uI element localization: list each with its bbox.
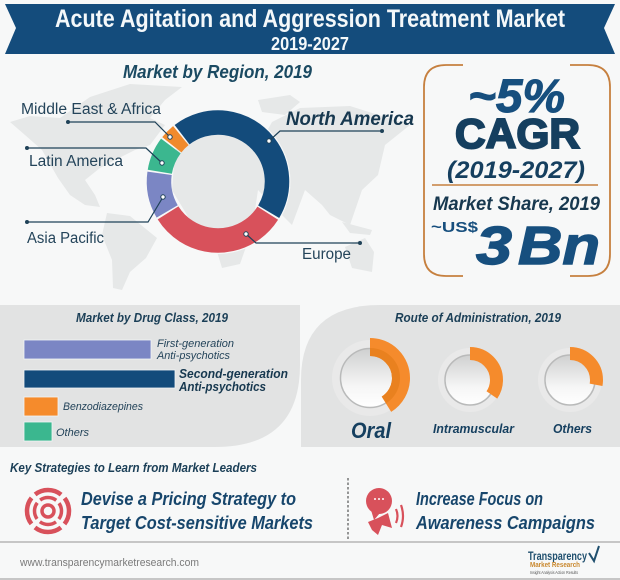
gauge: oral [332,340,408,443]
callout: CAGR and market share: (2019-2027) [447,157,585,184]
callout: CAGR and market share [424,65,610,276]
callout: CAGR and market share: Bn [518,216,600,276]
callout: CAGR and market share: ~US$ [431,219,479,236]
callout: CAGR and market share: Market Share, 2019 [433,194,600,215]
panel: route of administration: Route of Administration, 2019 [395,310,562,325]
leader lines and region labels [21,101,414,263]
subtitle: market by region: Market by Region, 2019 [123,62,312,82]
gauge: intramuscular [433,348,515,436]
strategy: awareness [415,488,595,533]
bar: others [24,422,52,441]
icon: speech and megaphone [366,488,403,535]
gauge: others: Others [553,421,592,436]
gauge: others [538,348,602,436]
panel: route of administration [301,305,620,447]
leader lines and region labels: Asia Pacific [27,230,104,247]
callout: CAGR and market share: 3 [476,216,512,276]
heading: key strategies: Key Strategies to Learn from Market Leaders [10,461,257,475]
panel: market by drug class: Second-generation [179,366,288,381]
icon: target [27,490,69,532]
callout: CAGR and market share: CAGR [455,110,580,157]
logo: Insight Analysis Action Results [530,570,579,575]
strategy: awareness: Increase Focus on [416,488,543,509]
callout: CAGR and market share: ~5% [468,69,565,122]
panel: market by drug class: Anti-psychotics [178,379,266,394]
logo: Market Research [530,562,580,569]
website url: www.transparencymarketresearch.com [19,557,199,569]
bar: first-generation [24,340,151,359]
bar: second-generation [24,370,175,388]
logo [528,546,599,575]
leader lines and region labels: Middle East & Africa [21,101,161,118]
logo: Transparency [528,549,587,563]
footer rules [0,541,620,543]
leader lines and region labels: Europe [302,246,351,263]
title banner: 2019-2027 [271,34,349,54]
gauge: intramuscular: Intramuscular [433,421,515,436]
strategy: pricing [81,488,313,533]
panel: market by drug class [0,305,300,447]
gauge: oral: Oral [351,418,392,443]
leader lines and region labels: North America [286,108,414,130]
panel: market by drug class: First-generation [157,338,234,350]
panel: market by drug class: Market by Drug Class, 2019 [76,310,229,325]
title banner [5,4,615,54]
panel: market by drug class: Others [56,427,89,439]
leader lines and region labels: Latin America [29,153,123,170]
strategy: pricing: Target Cost-sensitive Markets [81,512,313,533]
divider [347,478,349,540]
strategy: awareness: Awareness Campaigns [415,512,595,533]
bar: benzodiazepines [24,397,58,416]
panel: market by drug class: Benzodiazepines [63,401,143,413]
strategy: pricing: Devise a Pricing Strategy to [81,488,296,509]
world map background [10,84,410,290]
panel: market by drug class: Anti-psychotics [156,350,230,362]
donut chart: market by region [135,99,301,264]
